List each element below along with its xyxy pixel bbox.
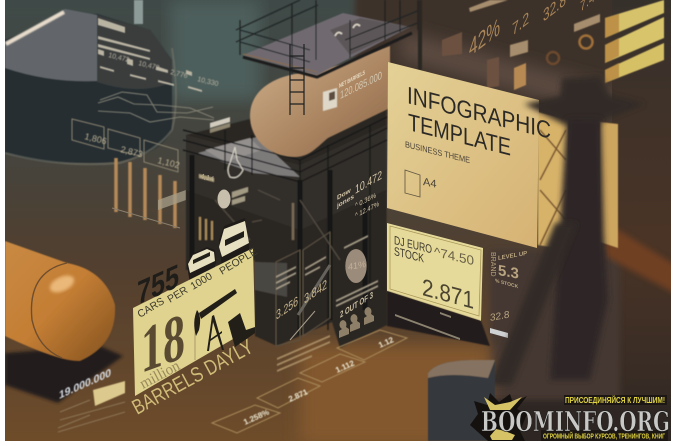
HUD: 19,000,000 label xyxy=(58,367,125,432)
title: BUSINESS THEME xyxy=(405,139,470,165)
pills on floor: 1.258% xyxy=(242,408,271,427)
window behind derrick xyxy=(538,112,618,250)
tower stats: jones xyxy=(336,194,354,210)
HUD: stat cards: 1,102 xyxy=(157,155,181,170)
yellow list bars xyxy=(605,0,664,83)
tank label: net barrels xyxy=(339,70,382,99)
people: 2 out of 3: 2 OUT OF 3 xyxy=(340,290,373,321)
pills on floor: 2.871 xyxy=(287,387,310,404)
number 755: 755 xyxy=(137,258,179,313)
panel: DJ Euro stock: 2.871 xyxy=(422,274,474,315)
top right HUD numbers: 7.2 xyxy=(512,8,529,40)
top right HUD numbers: 42% xyxy=(469,12,500,62)
diagonal indicators xyxy=(290,265,330,340)
title: INFOGRAPHIC xyxy=(407,82,551,145)
cars per 1000 people: 1000 xyxy=(188,270,215,293)
tank label: net barrels: 120.085.000 xyxy=(340,69,382,102)
icon: truck xyxy=(219,218,249,268)
tower paragraph text xyxy=(276,235,378,307)
cars per 1000 people: PEOPLE xyxy=(217,246,260,278)
pills on floor xyxy=(212,330,407,433)
tower stats: ^ 12.47% xyxy=(355,199,379,220)
main title panel xyxy=(387,62,551,248)
title: TEMPLATE xyxy=(408,109,511,162)
HUD: brand and level up: LEVEL UP xyxy=(498,251,527,262)
HUD: brand and level up: % STOCK xyxy=(495,278,519,290)
HUD: tank data table xyxy=(98,18,219,92)
pills on floor: 1.12 xyxy=(377,335,396,350)
panel: DJ Euro stock: STOCK xyxy=(394,244,424,265)
HUD: stat cards: 1,806 xyxy=(84,131,108,146)
panel: DJ Euro stock: DJ EURO xyxy=(394,233,432,256)
HUD: stat cards: 2,873 xyxy=(120,144,144,159)
dark tower base xyxy=(387,291,490,346)
gauge: 41 percent: 41% xyxy=(348,259,366,272)
tower stats: 3.256 xyxy=(276,294,298,324)
cars per 1000 people: CARS xyxy=(135,295,167,321)
million: million xyxy=(137,357,183,393)
ladder xyxy=(290,44,304,115)
HUD: brand and level up: 5.3 xyxy=(498,262,519,283)
tower stats: ^ 0.36% xyxy=(355,191,376,210)
cars per 1000 people xyxy=(138,248,258,317)
title xyxy=(405,82,551,191)
title: A4 xyxy=(423,176,436,191)
HUD: 19,000,000 label: 19.000.000 xyxy=(59,367,111,402)
tower stats: 10.472 xyxy=(355,167,382,197)
gauge: 41 percent xyxy=(345,249,367,283)
HUD: brand and level up xyxy=(489,251,527,338)
HUD: tank data table: 10,472 xyxy=(138,60,160,72)
bar chart xyxy=(112,158,186,228)
floor paragraph text xyxy=(277,335,330,372)
watermark: boominfo xyxy=(470,393,670,441)
HUD: tank data table: 10,330 xyxy=(197,76,219,88)
panel: DJ Euro stock xyxy=(387,223,483,321)
panel: DJ Euro stock: ^74.50 xyxy=(434,244,474,268)
upper platform xyxy=(236,0,420,77)
number 18: 18 xyxy=(141,298,185,388)
line chart xyxy=(98,92,214,122)
people: 2 out of 3 xyxy=(339,290,374,338)
top right HUD labels and icons xyxy=(442,0,600,90)
icon: car xyxy=(187,247,216,280)
barrels dayly: BARRELS DAYLY xyxy=(128,335,257,419)
icon: pump jack xyxy=(194,289,255,351)
separator xyxy=(194,318,196,360)
tower stats: 3.842 xyxy=(304,277,327,308)
refinery tower xyxy=(183,85,387,348)
storage tank, left xyxy=(5,0,176,164)
tank label: net barrels: NET BARRELS xyxy=(339,69,365,90)
HUD: tank data table: 2,776 xyxy=(170,69,188,80)
pills on floor: 1.112 xyxy=(334,358,356,375)
HUD: brand and level up: BRAND xyxy=(489,252,496,277)
gauge: small dial xyxy=(218,190,230,208)
tower stats: Dow xyxy=(337,187,351,202)
tank: white sphere vessel xyxy=(250,46,390,157)
icon: A4 sheet xyxy=(405,170,420,197)
cars per 1000 people: PER xyxy=(165,284,190,306)
tower stats xyxy=(200,167,382,324)
HUD: brand and level up: 32.8 xyxy=(490,310,510,324)
orange rail tank xyxy=(5,241,123,403)
blurred derrick, foreground xyxy=(490,76,645,385)
HUD: stat cards xyxy=(72,119,181,172)
tower stats: 4,14 xyxy=(200,173,215,183)
top right HUD numbers xyxy=(469,0,594,53)
icon: bomb blast xyxy=(470,393,527,441)
HUD: tank data table: 10,472 xyxy=(108,52,130,64)
panel: 18 million barrels xyxy=(133,246,260,396)
blurred cylinder, foreground xyxy=(428,360,495,441)
